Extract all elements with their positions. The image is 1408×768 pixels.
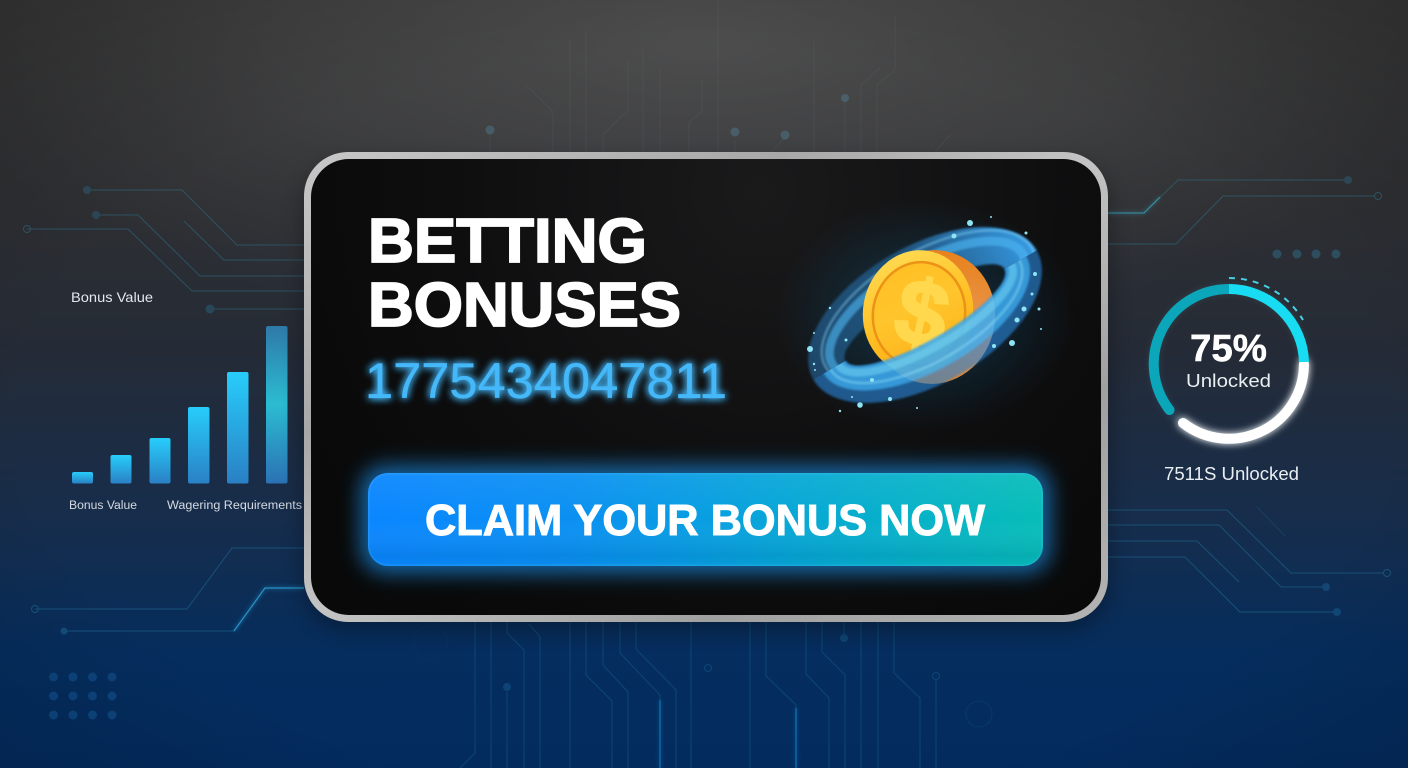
bright circuit accents: bottom centre (660, 700, 796, 768)
circuit nodes: top centre (486, 94, 849, 140)
bright trace: left upper (237, 244, 304, 246)
dots: right upper (1272, 250, 1340, 258)
swirl: back (806, 226, 1038, 380)
coin inner ring (865, 255, 973, 373)
ring: teal arc (1154, 289, 1229, 410)
axis label: Bonus Value: Bonus Value (69, 500, 137, 512)
bars (72, 326, 288, 484)
bright trace: right upper (1108, 197, 1160, 213)
button label: CLAIM YOUR BONUS NOW (425, 496, 985, 545)
dollar sign: $ (886, 259, 958, 369)
main card (302, 152, 1110, 630)
circuit traces: right lower (1108, 507, 1390, 616)
ring: white arc (1183, 364, 1304, 439)
button body (368, 473, 1043, 566)
icon: gold coin with blue swirl (798, 216, 1053, 414)
axis label: Wagering Requirements: Wagering Requirements (167, 500, 302, 512)
circuit traces: bottom centre (414, 622, 992, 768)
chart heading: Bonus Value: Bonus Value (71, 289, 153, 305)
circuit traces: right upper (1108, 176, 1382, 244)
call-to-action button (360, 465, 1051, 574)
title (368, 207, 681, 340)
label: Unlocked: Unlocked (1186, 371, 1271, 391)
circuit traces: left upper (24, 186, 304, 314)
sparkles (807, 216, 1042, 412)
ring: dashed outer arc (1229, 278, 1303, 320)
coin halo (775, 200, 1075, 430)
panel: 75% unlocked progress ring (1154, 278, 1304, 484)
ring glow (1154, 289, 1304, 439)
card shadow (302, 160, 1110, 630)
panel: bonus value bar chart (69, 289, 302, 512)
swirl: front (812, 250, 1044, 404)
coin (853, 240, 1006, 394)
title: BONUSES (368, 271, 681, 340)
bright trace: right lower (1108, 556, 1185, 558)
card frame (304, 152, 1108, 622)
coin face (853, 241, 983, 383)
button glow (360, 465, 1051, 574)
coin edge (860, 240, 1006, 394)
dot grid: bottom left (49, 672, 116, 720)
card body (311, 159, 1101, 615)
circuit traces: left lower (32, 548, 304, 634)
value: 75%: 75% (1190, 328, 1267, 370)
button highlight (368, 473, 1043, 566)
bright trace: left lower (234, 588, 304, 631)
title: BETTING (368, 207, 647, 276)
bonus code number: 1775434047811 (365, 353, 727, 409)
circuit traces: top centre (490, 0, 950, 152)
caption: 7511S Unlocked: 7511S Unlocked (1164, 464, 1299, 484)
ring: cyan arc (1229, 289, 1304, 362)
